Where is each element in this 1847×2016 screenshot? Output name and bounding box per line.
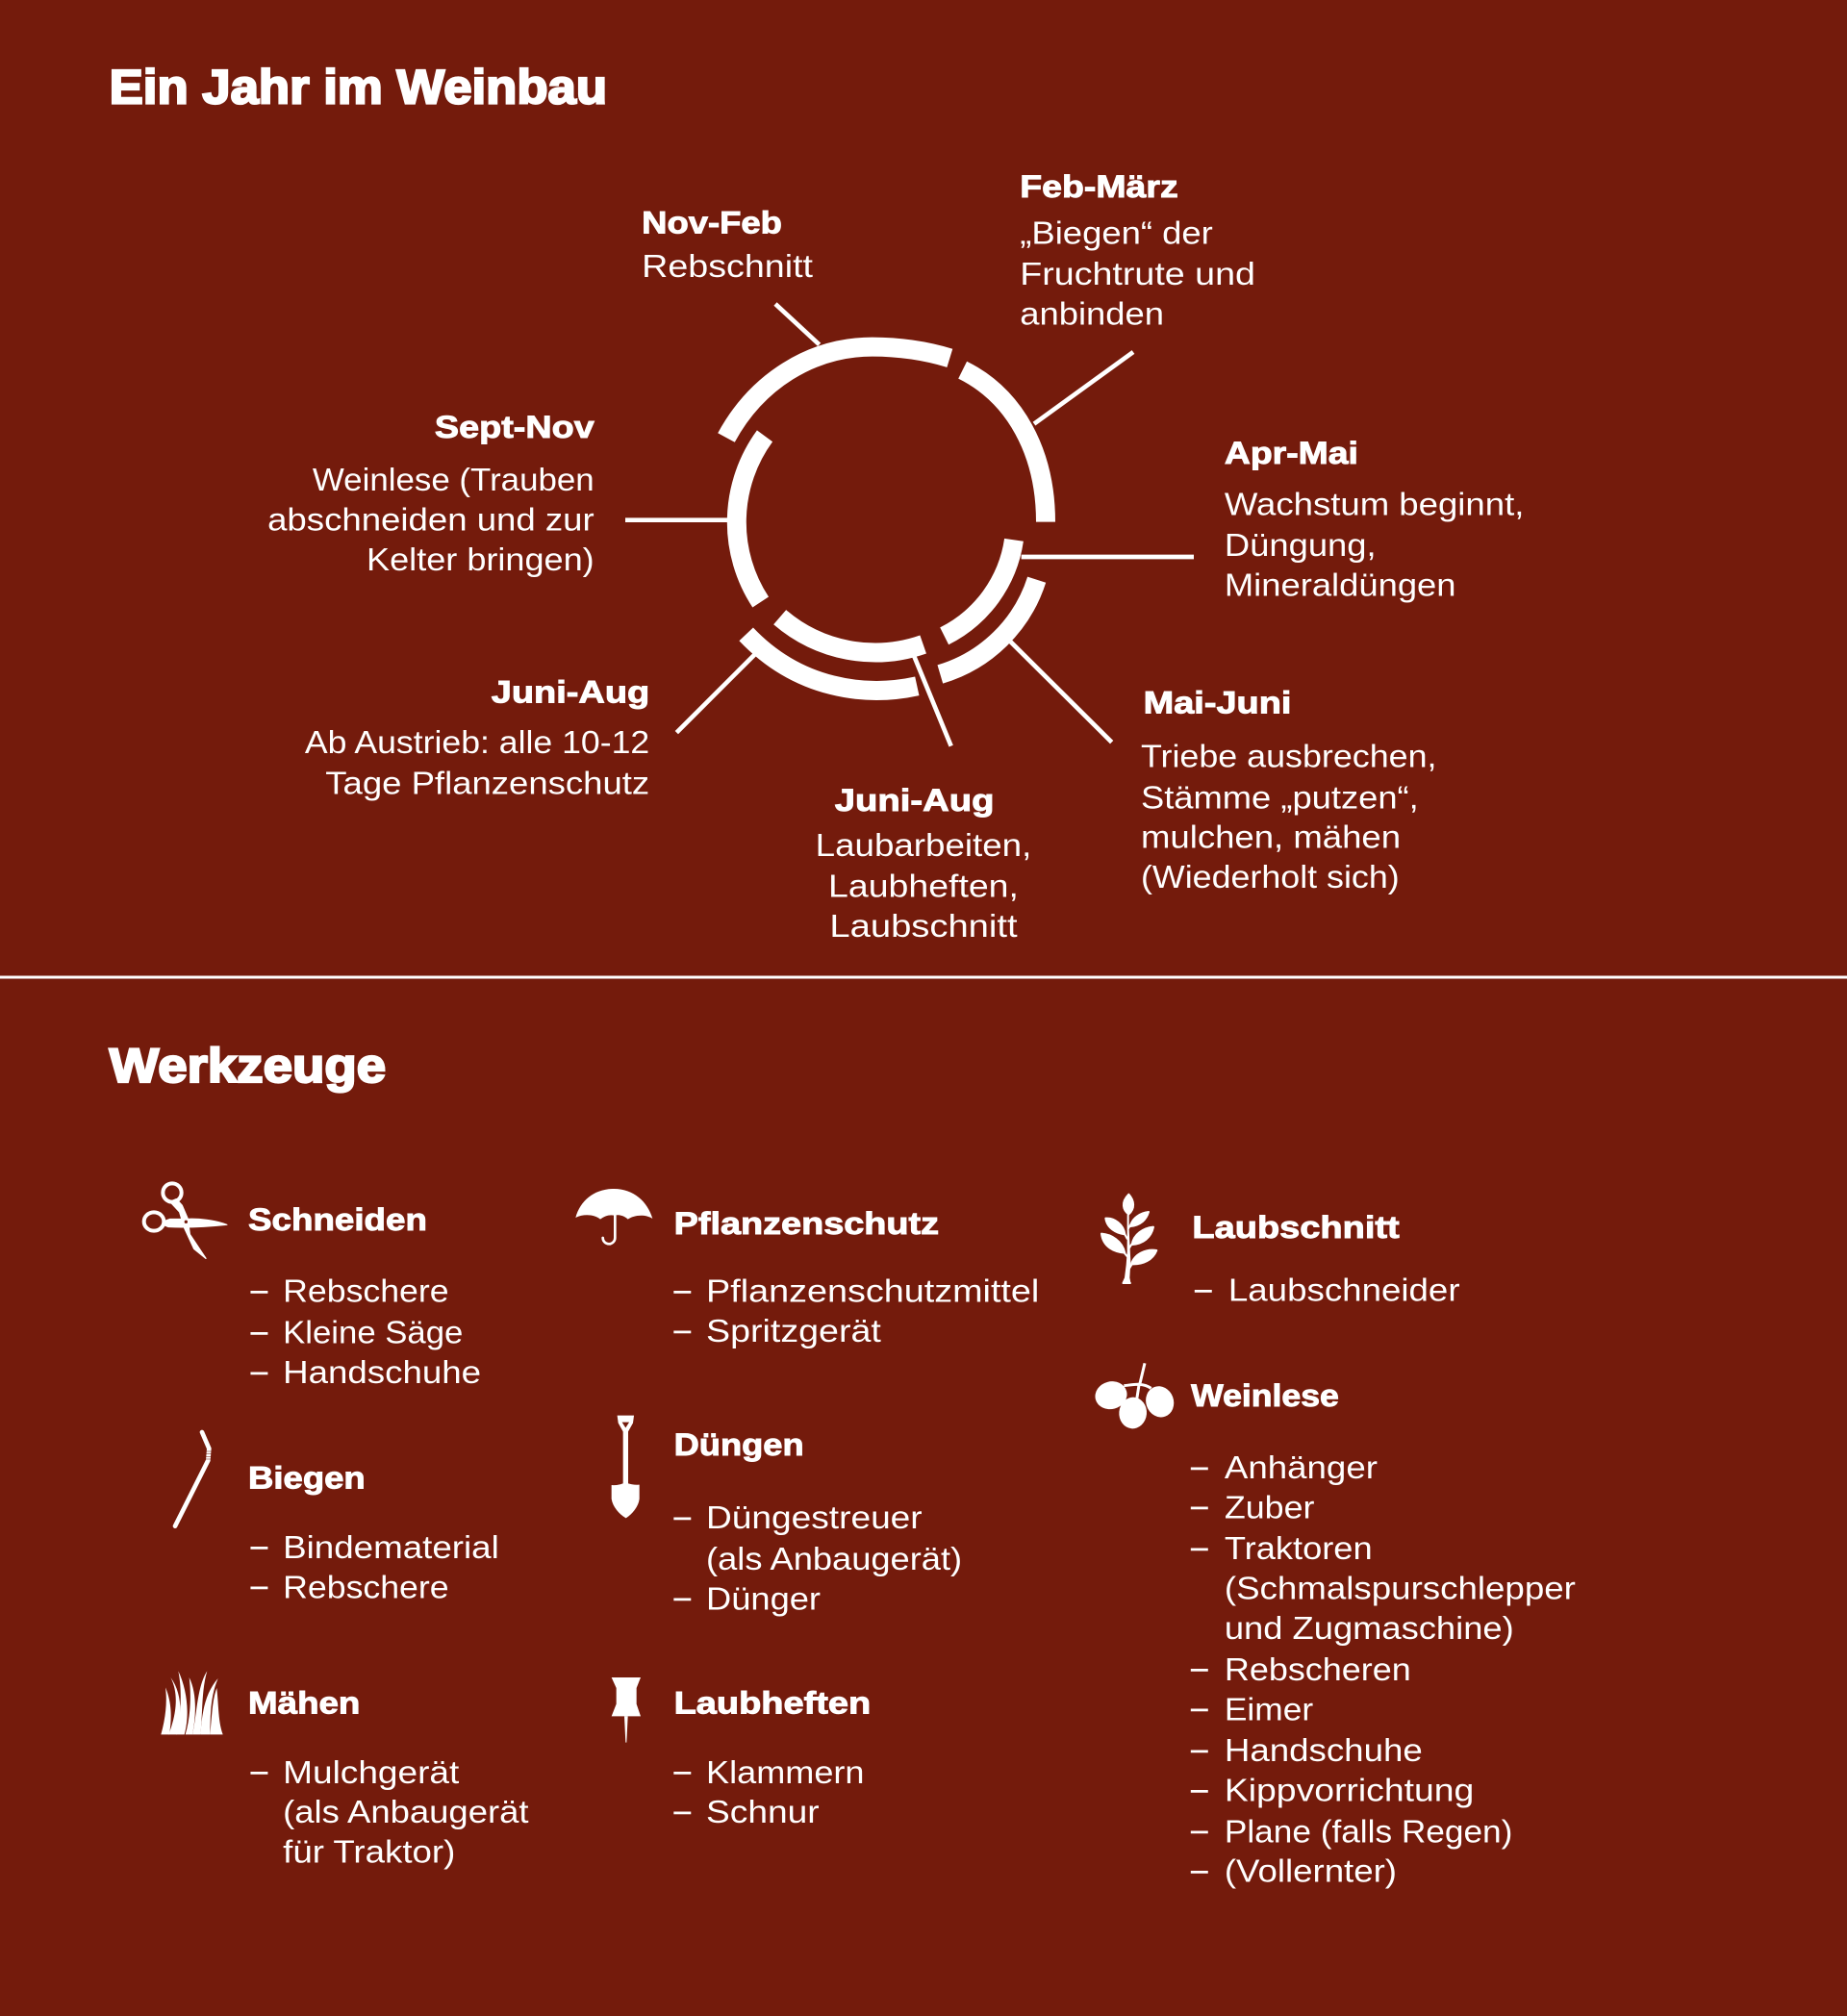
label: Apr-Mai: Wachstum beginnt,: [1225, 487, 1524, 522]
label: Juni-Aug Laubarbeiten: Laubschnitt: [829, 909, 1018, 945]
label: Feb-März: Feb-März: [1020, 169, 1178, 204]
tool block: Weinlese: –: [1191, 1489, 1208, 1525]
arc: Mai-Juni: [940, 580, 1037, 674]
label: Juni-Aug Pflanzenschutz: Ab Austrieb: alle 10-12: [305, 725, 649, 761]
label: Feb-März: Fruchtrute und: [1020, 257, 1255, 292]
tool block: Schneiden: [248, 1202, 481, 1391]
label: Sept-Nov: Kelter bringen): [367, 542, 595, 578]
label: Feb-März: „Biegen“ der: [1020, 215, 1213, 251]
tool block: Laubheften: Schnur: [706, 1795, 820, 1830]
label: Juni-Aug Laubarbeiten: [816, 783, 1031, 945]
tool block: Weinlese: und Zugmaschine): [1225, 1611, 1514, 1647]
tool block: Weinlese: Zuber: [1225, 1490, 1314, 1525]
cycle diagram: ring segments and leader lines: [625, 304, 1194, 746]
tool block: Mähen: [248, 1686, 529, 1871]
tool block: Laubschnitt: Laubschneider: [1228, 1273, 1460, 1308]
tool block: Düngen: Düngestreuer: [706, 1500, 923, 1536]
tool block: Pflanzenschutz: –: [674, 1273, 691, 1308]
tool block: Biegen: –: [251, 1528, 267, 1564]
label: Juni-Aug Laubarbeiten: Laubheften,: [828, 869, 1019, 905]
tool block: Mähen: für Traktor): [283, 1835, 455, 1871]
icon: shovel: [612, 1416, 639, 1518]
label: Mai-Juni: Mai-Juni: [1144, 685, 1291, 719]
tool block: Biegen: [248, 1461, 499, 1605]
arc: Sept-Nov: [737, 436, 765, 602]
label: Mai-Juni: (Wiederholt sich): [1141, 860, 1400, 895]
arc: Nov-Feb Rebschnitt: [726, 347, 949, 438]
tool block: Pflanzenschutz: Pflanzenschutzmittel: [706, 1274, 1039, 1310]
label: Nov-Feb: Rebschnitt: [642, 249, 814, 285]
tool block: Biegen: Rebschere: [283, 1570, 449, 1605]
tool block: Weinlese: Traktoren: [1225, 1531, 1373, 1567]
tool block: Weinlese: –: [1191, 1530, 1208, 1566]
tool block: Weinlese: Rebscheren: [1225, 1652, 1411, 1688]
arc: Feb-März: [963, 370, 1046, 522]
tool block: Laubheften: –: [674, 1794, 691, 1829]
tool block: Mähen: Mulchgerät: [283, 1755, 460, 1791]
tool block: Weinlese: –: [1191, 1691, 1208, 1726]
tool block: Weinlese: –: [1191, 1731, 1208, 1767]
label: Sept-Nov: abschneiden und zur: [267, 503, 595, 539]
tool block: Laubheften: –: [674, 1753, 691, 1789]
heading: Werkzeuge: Werkzeuge: [110, 1039, 386, 1093]
leader line: Juni-Aug Pflanzenschutz: [676, 655, 754, 733]
label: Feb-März: anbinden: [1020, 297, 1164, 333]
tool block: Laubheften: Laubheften: [674, 1686, 871, 1721]
leader line: Nov-Feb: [775, 304, 820, 344]
tool block: Schneiden: –: [251, 1353, 267, 1389]
tool block: Pflanzenschutz: [674, 1206, 1039, 1349]
tool block: Weinlese: Eimer: [1225, 1692, 1313, 1727]
arc: Juni-Aug Pflanzenschutz: [746, 634, 917, 691]
label: Sept-Nov: [267, 410, 595, 578]
tool block: Weinlese: –: [1191, 1852, 1208, 1888]
tool block: Düngen: Düngen: [674, 1427, 804, 1462]
tool block: Weinlese: –: [1191, 1449, 1208, 1484]
tool block: Düngen: –: [674, 1499, 691, 1534]
tool block: Laubheften: Klammern: [706, 1755, 864, 1791]
tool block: Schneiden: Rebschere: [283, 1274, 449, 1310]
icon: grapes: [1092, 1363, 1178, 1430]
tool block: Biegen: Biegen: [248, 1461, 366, 1496]
leader line: Feb-März: [1034, 352, 1133, 424]
icon: scissors: [144, 1183, 227, 1258]
icon: leafy branch: [1101, 1195, 1156, 1283]
label: Apr-Mai: Düngung,: [1225, 528, 1377, 564]
tool block: Pflanzenschutz: Spritzgerät: [706, 1314, 882, 1349]
leader line: Sept-Nov: [625, 514, 727, 527]
tool block: Schneiden: Handschuhe: [283, 1355, 481, 1391]
label: Juni-Aug Laubarbeiten: Laubarbeiten,: [816, 828, 1031, 864]
tool block: Weinlese: Weinlese: [1191, 1378, 1339, 1413]
tool block: Pflanzenschutz: –: [674, 1313, 691, 1348]
icon: grass: [161, 1671, 223, 1734]
label: Juni-Aug Pflanzenschutz: [305, 675, 649, 802]
tool block: Laubschnitt: [1192, 1210, 1460, 1308]
leader line: Mai-Juni: [1010, 642, 1112, 743]
tool block: Weinlese: –: [1191, 1772, 1208, 1807]
tool block: Weinlese: (Vollernter): [1225, 1854, 1397, 1890]
tool block: Schneiden: –: [251, 1273, 267, 1308]
tool block: Laubschnitt: Laubschnitt: [1192, 1210, 1400, 1245]
label: Sept-Nov: Weinlese (Trauben: [313, 463, 595, 498]
tool block: Düngen: Dünger: [706, 1581, 821, 1617]
tool block: Weinlese: –: [1191, 1813, 1208, 1849]
arc: Juni-Aug Laubarbeiten: [780, 617, 924, 652]
tool block: Weinlese: [1191, 1378, 1576, 1890]
tool block: Laubheften: [674, 1686, 871, 1830]
title: Ein Jahr im Weinbau: Ein Jahr im Weinbau: [110, 61, 607, 114]
tool block: Mähen: (als Anbaugerät: [283, 1795, 529, 1830]
leader line: Apr-Mai: [1022, 550, 1194, 564]
tool block: Pflanzenschutz: Pflanzenschutz: [674, 1206, 939, 1241]
label: Apr-Mai: Mineraldüngen: [1225, 568, 1456, 604]
arc: Apr-Mai: [945, 540, 1014, 636]
tool block: Düngen: –: [674, 1580, 691, 1616]
label: Juni-Aug Pflanzenschutz: Juni-Aug: [492, 675, 649, 710]
tool block: Düngen: [674, 1427, 962, 1617]
tool block: Schneiden: –: [251, 1314, 267, 1349]
icon: push pin: [612, 1677, 641, 1743]
label: Mai-Juni: Triebe ausbrechen,: [1141, 740, 1436, 775]
icon: umbrella: [575, 1189, 652, 1244]
label: Nov-Feb: [642, 206, 814, 285]
tool block: Laubschnitt: –: [1195, 1272, 1212, 1307]
tool block: Mähen: Mähen: [248, 1686, 360, 1721]
label: Mai-Juni: mulchen, mähen: [1141, 820, 1401, 856]
tool block: Weinlese: Handschuhe: [1225, 1733, 1423, 1769]
tool block: Biegen: –: [251, 1569, 267, 1604]
tool block: Düngen: (als Anbaugerät): [706, 1542, 962, 1577]
tool block: Biegen: Bindematerial: [283, 1530, 499, 1566]
tool block: Weinlese: (Schmalspurschlepper: [1225, 1572, 1576, 1607]
tool block: Weinlese: Kippvorrichtung: [1225, 1774, 1474, 1809]
tool block: Mähen: –: [251, 1753, 267, 1789]
label: Apr-Mai: Apr-Mai: [1225, 436, 1358, 470]
tool block: Weinlese: Plane (falls Regen): [1225, 1814, 1512, 1850]
icon: bent straw: [175, 1432, 212, 1526]
label: Mai-Juni: Stämme „putzen“,: [1141, 780, 1419, 816]
label: Feb-März: [1020, 169, 1255, 333]
label: Apr-Mai: [1225, 436, 1524, 604]
tool block: Weinlese: Anhänger: [1225, 1450, 1378, 1486]
tool block: Weinlese: –: [1191, 1651, 1208, 1686]
tool block: Schneiden: Kleine Säge: [283, 1316, 463, 1351]
tool block: Schneiden: Schneiden: [248, 1202, 427, 1237]
label: Juni-Aug Pflanzenschutz: Tage Pflanzenschutz: [325, 767, 649, 802]
label: Nov-Feb: Nov-Feb: [642, 206, 782, 240]
label: Juni-Aug Laubarbeiten: Juni-Aug: [835, 783, 995, 818]
label: Mai-Juni: [1141, 685, 1436, 895]
label: Sept-Nov: Sept-Nov: [435, 410, 595, 444]
leader line: Juni-Aug Laubarbeiten: [914, 656, 951, 746]
